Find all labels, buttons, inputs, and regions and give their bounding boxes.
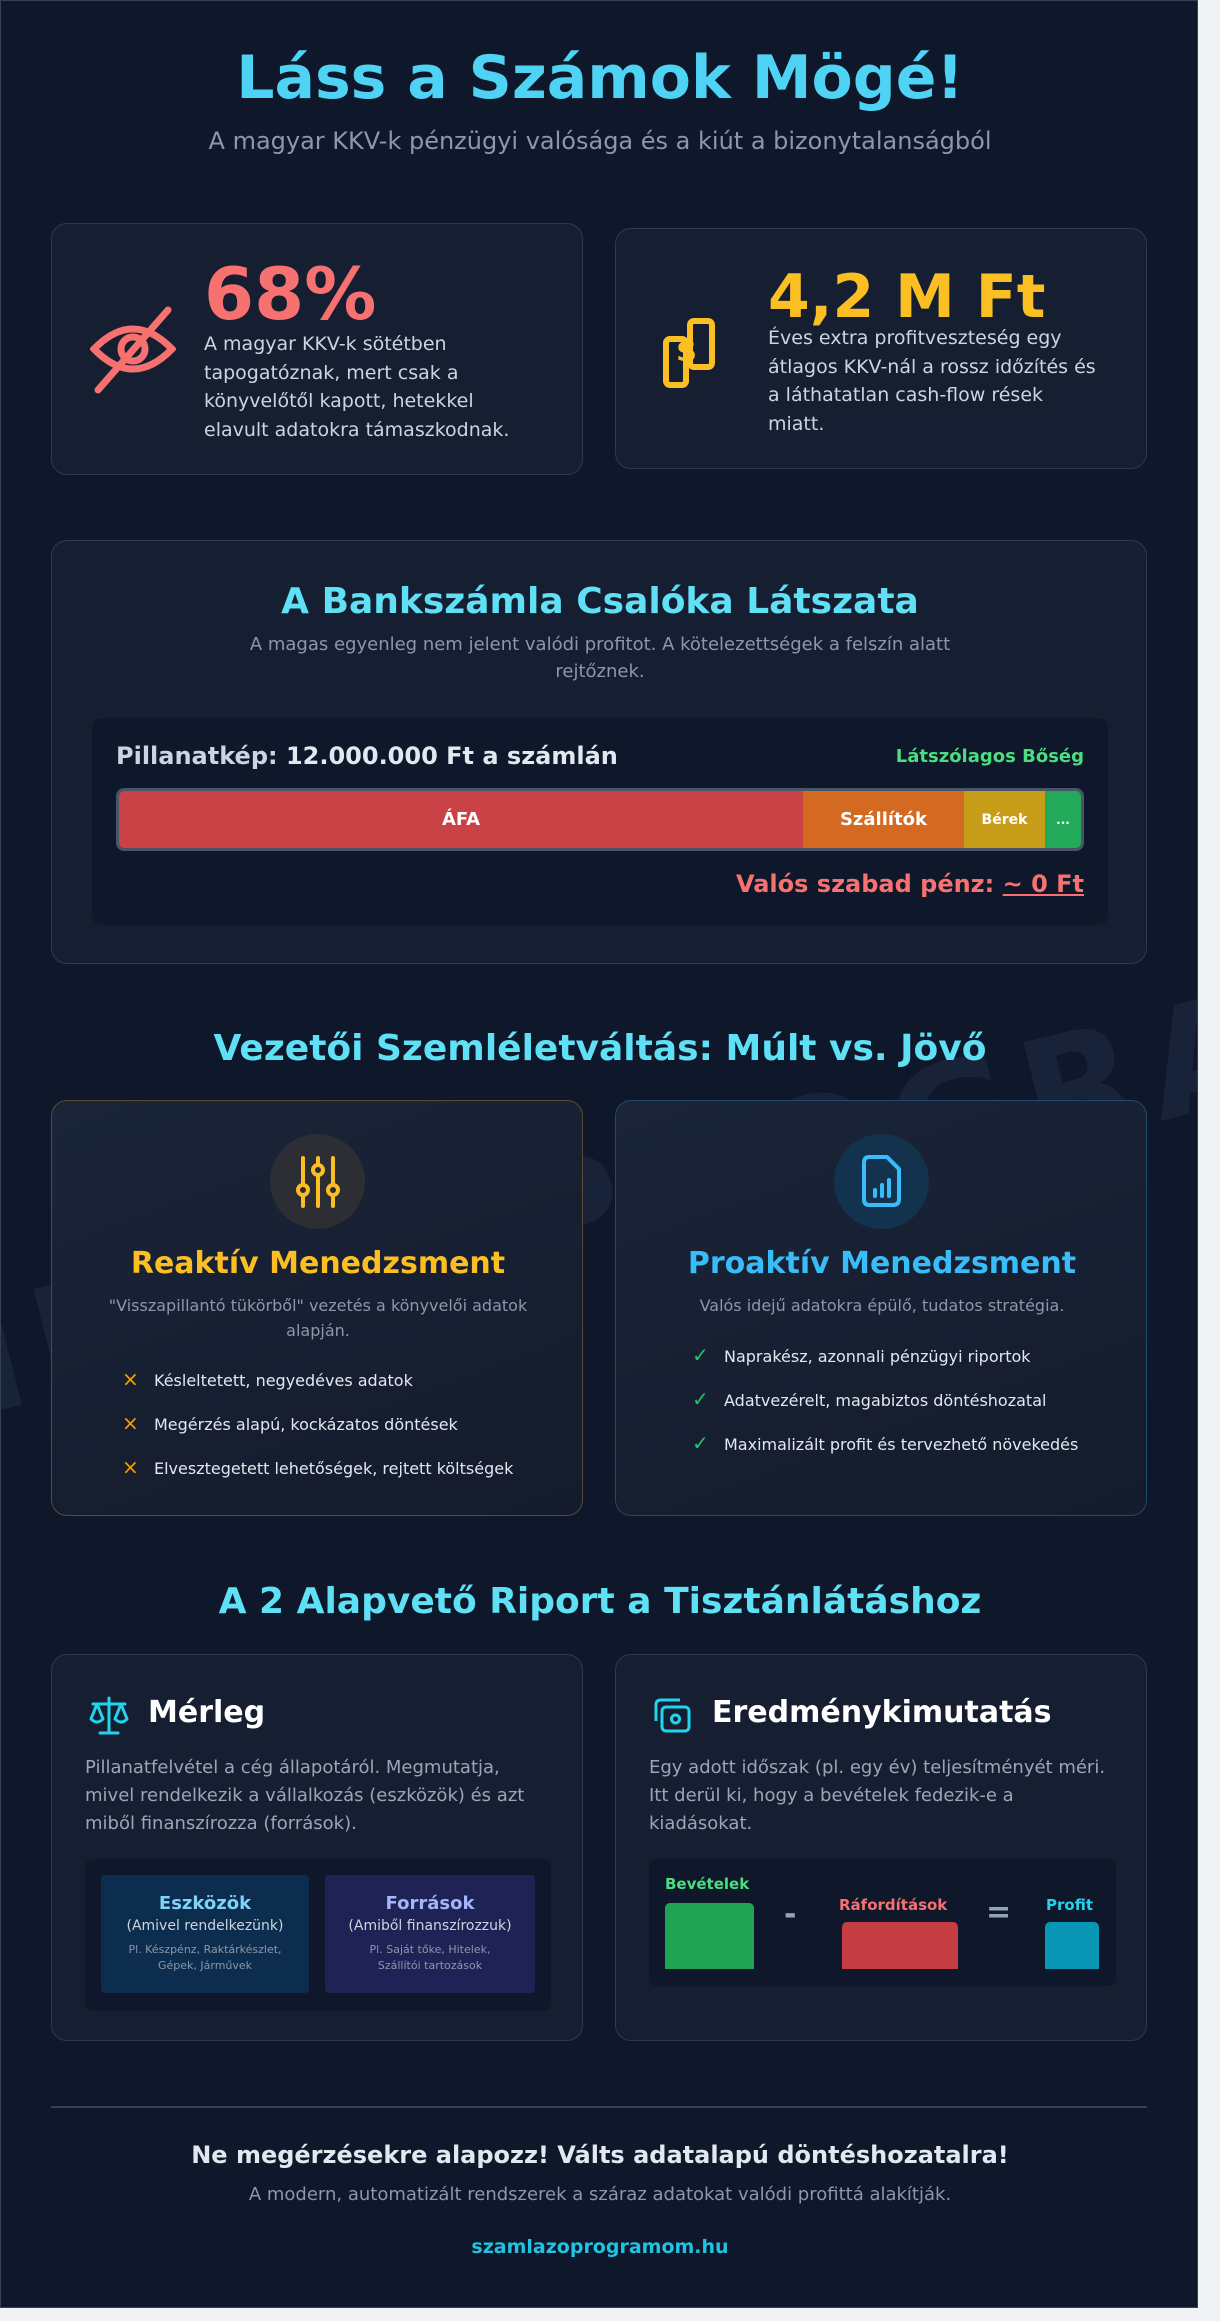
chart: revenue - costs = profit	[649, 1859, 1116, 1986]
list: negatives: Elvesztegetett lehetőségek, rejtett költségek	[154, 1459, 513, 1478]
description: Egy adott időszak (pl. egy év) teljesítményét méri. Itt derül ki, hogy a bevételek fedezik-e a kiadásokat.	[649, 1757, 1105, 1834]
list: negatives: ×	[122, 1367, 139, 1391]
footer subtitle: A modern, automatizált rendszerek a száraz adatokat valódi profittá alakítják.	[249, 2184, 951, 2205]
icon: money: $	[676, 334, 697, 369]
description: Pillanatfelvétel a cég állapotáról. Megmutatja, mivel rendelkezik a vállalkozás (eszközök) és azt miből finanszírozza (források).	[85, 1757, 524, 1834]
icon: money	[663, 318, 715, 388]
footer link: szamlazoprogramom.hu	[471, 2236, 729, 2258]
stacked bar: ...	[1056, 812, 1070, 826]
stacked bar	[116, 788, 1084, 851]
bar: profit: Profit	[1046, 1896, 1093, 1914]
stacked bar: Bérek	[982, 812, 1027, 828]
description: "Visszapillantó tükörből" vezetés a könyvelői adatok alapján.	[109, 1296, 527, 1340]
box: sources: Szállítói tartozások	[378, 1959, 482, 1972]
list: positives: ✓	[692, 1343, 709, 1367]
list: positives	[692, 1343, 1078, 1455]
bar: revenue: Bevételek	[665, 1875, 749, 1893]
box: assets: Eszközök	[159, 1893, 251, 1914]
list: negatives: Megérzés alapú, kockázatos döntések	[154, 1415, 458, 1434]
icon: sliders	[270, 1134, 365, 1229]
icon: cash	[654, 1698, 690, 1732]
list: positives: ✓	[692, 1387, 709, 1411]
stat description: A magyar KKV-k sötétben tapogatóznak, mert csak a könyvelőtől kapott, hetekkel elavult adatokra támaszkodnak.	[204, 333, 509, 440]
stat description: Éves extra profitveszteség egy átlagos KKV-nál a rossz időzítés és a láthatatlan cash-flow rések miatt.	[768, 327, 1096, 434]
list: positives: ✓	[692, 1431, 709, 1455]
subtitle: A magyar KKV-k pénzügyi valósága és a kiút a bizonytalanságból	[209, 127, 991, 155]
list: positives: Adatvezérelt, magabiztos döntéshozatal	[724, 1391, 1046, 1410]
stat value: 68%	[204, 252, 376, 336]
stacked bar: ÁFA	[442, 809, 480, 830]
heading: Reaktív Menedzsment	[131, 1246, 505, 1281]
list: negatives	[122, 1367, 514, 1479]
box: assets: (Amivel rendelkezünk)	[126, 1918, 284, 1934]
bar: costs: Ráfordítások	[839, 1896, 947, 1914]
apparent label: Látszólagos Bőség	[896, 746, 1084, 767]
real free money: Valós szabad pénz: ~ 0 Ft	[736, 870, 1084, 898]
diagram: assets vs sources	[85, 1859, 551, 2011]
description: Valós idejű adatokra épülő, tudatos stratégia.	[700, 1296, 1064, 1315]
panel: balance sheet	[51, 1654, 583, 2041]
description: A magas egyenleg nem jelent valódi profitot. A kötelezettségek a felszín alatt rejtőznek.	[250, 634, 950, 682]
panel: proactive	[615, 1100, 1147, 1516]
title: Láss a Számok Mögé!	[236, 43, 964, 113]
list: positives: Maximalizált profit és tervezhető növekedés	[724, 1435, 1078, 1454]
list: positives: Naprakész, azonnali pénzügyi riportok	[724, 1347, 1031, 1366]
equals sign: =	[986, 1895, 1011, 1930]
box: assets	[101, 1875, 309, 1993]
stat card: 4,2 M Ft	[615, 228, 1147, 469]
box: sources: (Amiből finanszírozzuk)	[348, 1918, 512, 1934]
icon: report file	[834, 1134, 929, 1229]
icon: crossed eye	[90, 306, 176, 394]
heading: Eredménykimutatás	[712, 1695, 1052, 1730]
footer headline: Ne megérzésekre alapozz! Válts adatalapú döntéshozatalra!	[191, 2141, 1009, 2169]
heading: Proaktív Menedzsment	[688, 1246, 1076, 1281]
list: negatives: Késleltetett, negyedéves adatok	[154, 1371, 413, 1390]
panel: reactive	[51, 1100, 583, 1516]
list: negatives: ×	[122, 1411, 139, 1435]
panel: income statement	[615, 1654, 1147, 2041]
list: negatives: ×	[122, 1455, 139, 1479]
box: sources: Pl. Saját tőke, Hitelek,	[370, 1943, 490, 1956]
inner chart box	[92, 718, 1108, 925]
box: sources: Források	[386, 1893, 474, 1914]
box: sources	[325, 1875, 535, 1993]
heading: A Bankszámla Csalóka Látszata	[281, 581, 919, 622]
heading: Mérleg	[148, 1695, 265, 1730]
section heading: mindset: Vezetői Szemléletváltás: Múlt vs. Jövő	[214, 1028, 986, 1069]
stat value: 4,2 M Ft	[768, 262, 1045, 332]
minus sign: -	[784, 1897, 796, 1932]
panel: bank account	[51, 540, 1147, 964]
box: assets: Pl. Készpénz, Raktárkészlet,	[128, 1943, 282, 1956]
box: assets: Gépek, Járművek	[158, 1959, 252, 1972]
snapshot label: Pillanatkép: 12.000.000 Ft a számlán	[116, 742, 618, 770]
stacked bar: Szállítók	[840, 809, 927, 830]
section heading: reports: A 2 Alapvető Riport a Tisztánlátáshoz	[219, 1581, 981, 1622]
icon: scales	[90, 1696, 128, 1734]
stat card: 68%	[51, 223, 583, 475]
